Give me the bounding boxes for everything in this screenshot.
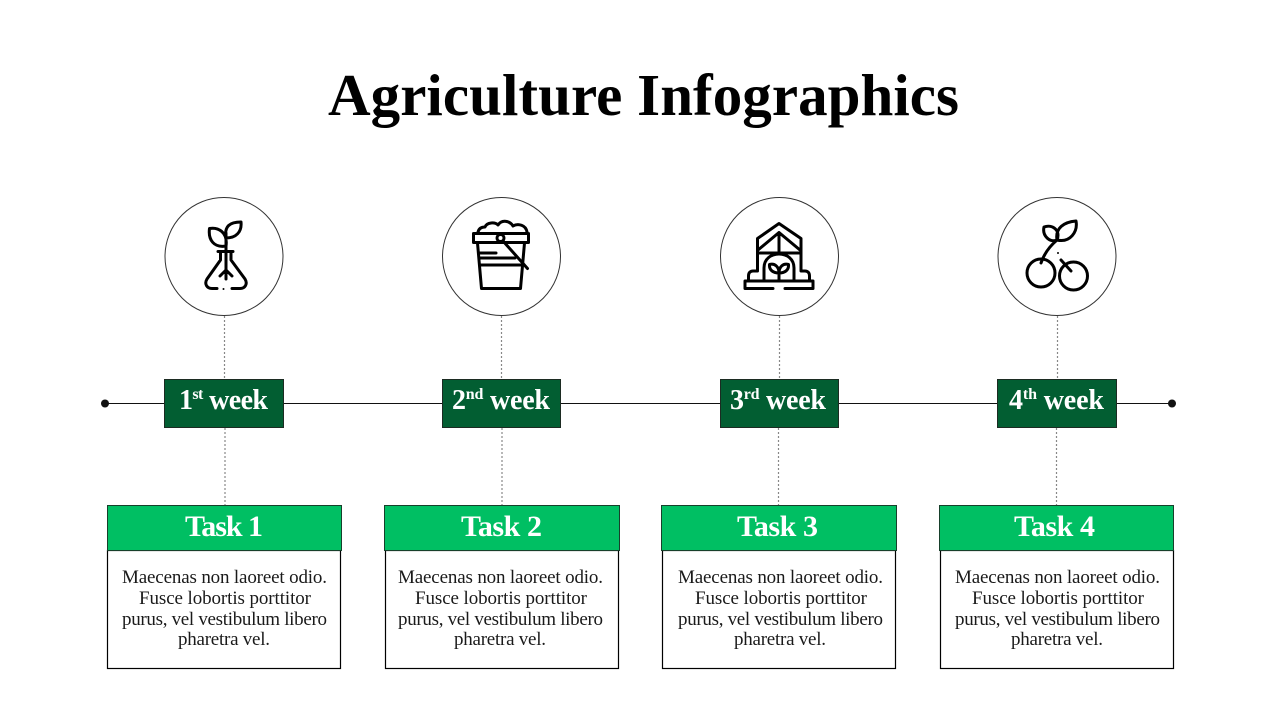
icon: bucket of soil [442, 198, 560, 316]
icon: cherries [998, 198, 1116, 316]
task text [678, 567, 883, 650]
task card [662, 506, 896, 668]
week label: week [203, 385, 268, 416]
week label: rd [744, 386, 760, 403]
week label: st [192, 386, 204, 403]
task card: Task 4 [1014, 510, 1095, 543]
task card [940, 506, 1174, 668]
task text: Fusce lobortis porttitor [695, 588, 868, 609]
column: week 4 [940, 198, 1174, 668]
column: week 1 [108, 198, 342, 668]
task text: purus, vel vestibulum libero [398, 609, 603, 630]
task text: purus, vel vestibulum libero [122, 609, 327, 630]
week label [998, 380, 1116, 428]
task text [122, 567, 327, 650]
task text: Maecenas non laoreet odio. [122, 567, 327, 588]
task text: pharetra vel. [734, 629, 826, 650]
task text [955, 567, 1160, 650]
task text: Maecenas non laoreet odio. [398, 567, 603, 588]
week label: 1 [179, 385, 193, 416]
icon: plant in flask [165, 198, 283, 316]
week label [164, 380, 284, 428]
column: week 2 [384, 198, 620, 668]
task text: Fusce lobortis porttitor [415, 588, 588, 609]
week label: th [1023, 386, 1037, 403]
task card [108, 506, 342, 668]
week label: 2 [452, 385, 466, 416]
title: Agriculture Infographics [328, 62, 959, 128]
week label [720, 380, 838, 428]
task text: pharetra vel. [1011, 629, 1103, 650]
task text: pharetra vel. [178, 629, 270, 650]
week label: week [483, 385, 550, 416]
week label: nd [466, 386, 483, 403]
task text: Fusce lobortis porttitor [139, 588, 312, 609]
icon: greenhouse [720, 198, 838, 316]
task text: Maecenas non laoreet odio. [678, 567, 883, 588]
task card: Task 3 [737, 510, 818, 543]
task card [384, 506, 620, 668]
task text: purus, vel vestibulum libero [678, 609, 883, 630]
week label: 4 [1009, 385, 1023, 416]
week label: 3 [730, 385, 744, 416]
task text: pharetra vel. [454, 629, 546, 650]
task text: Fusce lobortis porttitor [972, 588, 1145, 609]
task card: Task 2 [461, 510, 542, 543]
week label: week [759, 385, 826, 416]
week label [442, 380, 560, 428]
task text [398, 567, 603, 650]
task text: purus, vel vestibulum libero [955, 609, 1160, 630]
week label: week [1037, 385, 1104, 416]
task card: Task 1 [185, 510, 263, 543]
task text: Maecenas non laoreet odio. [955, 567, 1160, 588]
timeline [101, 400, 1176, 408]
column: week 3 [662, 198, 896, 668]
